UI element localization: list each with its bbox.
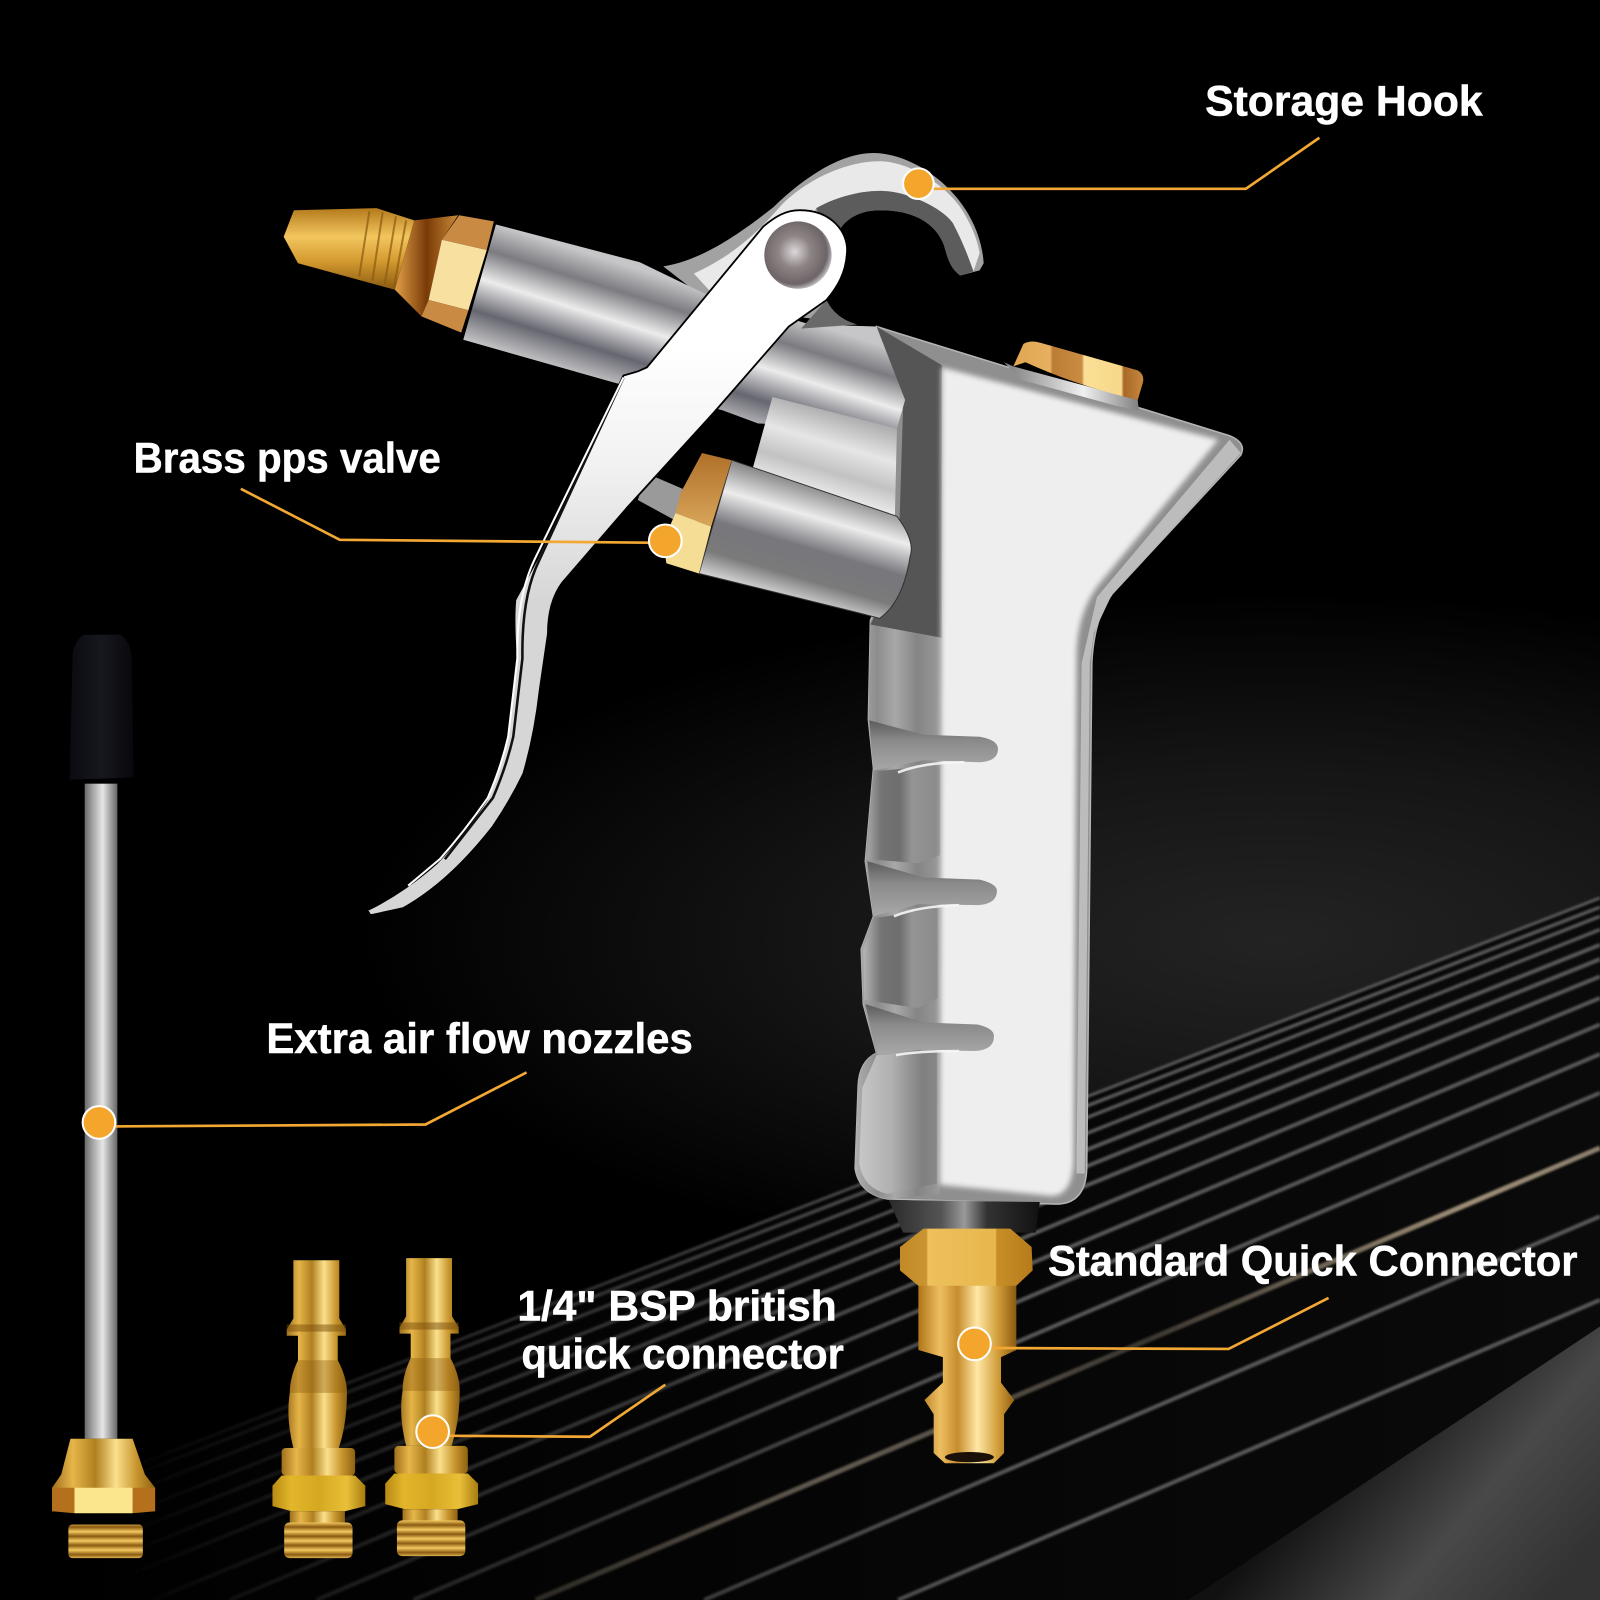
label: standard quick connector: Standard Quick Connector (1048, 1238, 1578, 1286)
label: brass pps valve: Brass pps valve (134, 434, 441, 482)
label: BSP british quick connector: quick connector (521, 1330, 844, 1378)
leader: standard quick connector (958, 1298, 1329, 1360)
nozzle wand cap (69, 635, 134, 780)
standard quick connector (900, 1229, 1033, 1463)
gun body (855, 327, 1242, 1204)
diagonal stripes backdrop (133, 898, 1600, 1600)
grip ridge blocks (859, 765, 940, 1194)
bottom right gray wedge (1189, 1327, 1600, 1600)
trigger lever (367, 210, 847, 915)
upper barrel (463, 224, 905, 429)
square plate (751, 397, 897, 515)
label: BSP british quick connector: 1/4" BSP british (517, 1282, 837, 1330)
lever rivet (764, 221, 832, 289)
brass nozzle tip (284, 208, 494, 333)
wand rod (85, 784, 117, 1439)
leader: BSP quick connector (416, 1385, 665, 1448)
label: extra air flow nozzles: Extra air flow nozzles (266, 1015, 693, 1063)
BSP british connector right (385, 1258, 478, 1556)
leader: brass pps valve (241, 489, 682, 557)
storage hook (663, 153, 984, 324)
BSP british connector left (272, 1260, 365, 1558)
grip grooves (865, 720, 998, 1055)
air blow gun (69, 153, 1242, 1463)
leader: extra air flow nozzles (83, 1072, 527, 1139)
valve hex nut (663, 453, 732, 573)
lower valve cylinder (699, 460, 911, 618)
label: BSP british quick connector (517, 1282, 844, 1378)
wand brass base (52, 1439, 155, 1558)
extra air flow nozzle (52, 784, 155, 1558)
quick connector collar (889, 1200, 1040, 1233)
valve rod (638, 473, 704, 531)
leader: storage hook (903, 138, 1319, 199)
brass top button (1004, 342, 1143, 410)
hook neck behind lever (801, 300, 857, 329)
label: storage hook: Storage Hook (1205, 77, 1483, 125)
